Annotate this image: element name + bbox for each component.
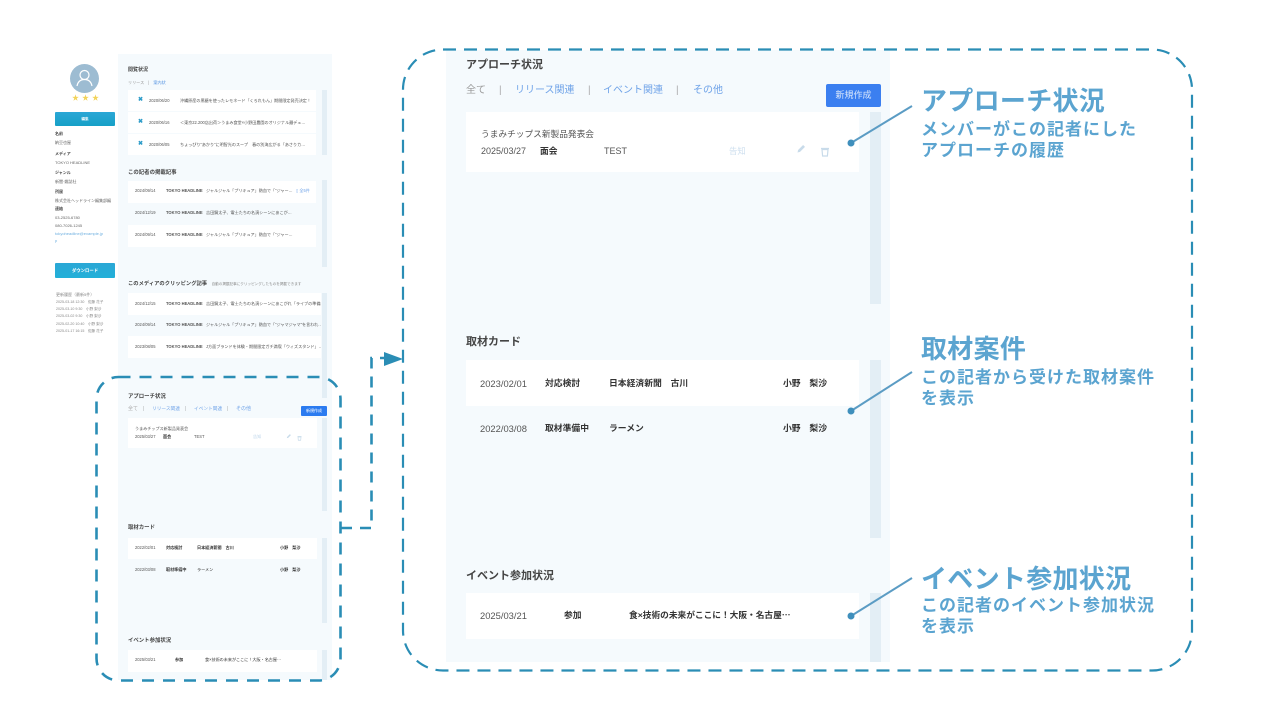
callout: event participation <box>921 564 1155 636</box>
list item: 2020/06/20 <box>149 98 170 103</box>
card: event item: 食×技術の未来がここに！大阪・名古屋⋯ <box>205 657 281 662</box>
text: update history: 2025-03-18 12:30 佐藤 花子 <box>56 300 103 304</box>
text: profile details: 連絡 <box>55 206 63 211</box>
arrow: dashed connector <box>342 352 402 530</box>
text: profile details: ジャンル <box>55 170 71 175</box>
card: approach item: TEST <box>194 434 204 439</box>
panel: profile sidebar <box>55 64 115 333</box>
interview item 2: 小野 梨沙 <box>783 423 827 433</box>
list item: J方面ブランドを体験・期間限定ガチ満喫「ウィズスタンド」… <box>206 344 321 349</box>
card: interview item <box>128 538 317 559</box>
heading: viewing status: 閲覧状況 <box>128 67 148 73</box>
section: interview cards <box>466 336 881 538</box>
card: interview item 1 <box>466 360 859 406</box>
text: profile details: 080-7026-1245 <box>55 223 82 228</box>
text: profile details: TOKYO HEADLINE <box>55 160 90 165</box>
text: update history: 2025-03-02 9:30 小野 梨沙 <box>56 314 101 318</box>
tabs: approach filters: イベント関連 <box>603 85 663 96</box>
list item: ✖ <box>138 119 143 125</box>
text: date: 2025/03/27 <box>481 146 526 156</box>
interview item 2: 取材準備中 <box>545 423 589 433</box>
text: profile details: p <box>55 238 57 243</box>
list item: 2020/06/05 <box>149 142 170 147</box>
list item: TOKYO HEADLINE <box>166 344 203 349</box>
card: interview item: 2022/02/01 <box>135 545 156 550</box>
card: interview item: 対応検討 <box>166 545 182 550</box>
list item <box>128 90 316 111</box>
icon: rating stars: ★★★ <box>72 95 102 102</box>
text: profile details: tokyoheadline@example.jp <box>55 231 103 236</box>
heading: event participation: イベント参加状況 <box>128 638 171 644</box>
interview item: 小野 梨沙 <box>280 567 300 572</box>
text: update history: 2025-01-17 16:15 佐藤 花子 <box>56 329 103 333</box>
list item: TOKYO HEADLINE <box>166 301 203 306</box>
card: event item: 2025/03/21 <box>135 657 156 662</box>
list item: ＜東京22.200店出荷＞うまみ食堂×小野田農園のオリジナル麺デュ… <box>180 120 305 125</box>
list item <box>128 134 316 155</box>
list item <box>128 112 316 133</box>
interview item <box>135 567 300 572</box>
card: interview item 1: 小野 梨沙 <box>783 378 827 388</box>
callout: approach status <box>921 86 1137 160</box>
card: interview item: 小野 梨沙 <box>280 545 300 550</box>
callout: event participation: を表示 <box>921 616 975 636</box>
heading: clipping articles: このメディアのクリッピング記事 自動の掲載記事にクリッピングしたものを掲載できます <box>128 281 301 287</box>
tabs: approach filters: その他 <box>693 85 723 96</box>
list item: ✖ <box>138 141 143 147</box>
callout: event participation: この記者のイベント参加状況 <box>921 596 1155 614</box>
scrollbar <box>870 360 881 538</box>
list item: TOKYO HEADLINE <box>166 210 203 215</box>
text: profile details: 株式会社ヘッドライン編集部編 <box>55 198 111 203</box>
section: articles by this reporter <box>128 168 327 267</box>
button: new <box>826 84 881 107</box>
tabs: approach filters: | <box>588 85 591 96</box>
tabs: approach filters <box>466 84 723 96</box>
card: event item: 2025/03/21 <box>480 610 527 621</box>
card: event item <box>128 650 317 672</box>
button: new: 新規作成 <box>835 90 872 100</box>
card: event item: 参加 <box>175 657 183 662</box>
text: profile details: メディア <box>55 151 71 156</box>
tabs: | <box>143 406 144 412</box>
tabs: その他 <box>236 406 251 412</box>
section: approach status <box>466 58 881 304</box>
card: interview item 1: 2023/02/01 <box>480 378 527 389</box>
list item <box>128 293 321 315</box>
icon: trash <box>821 148 829 157</box>
callout: interview cards: を表示 <box>921 388 975 408</box>
button: edit: 編集 <box>81 117 89 121</box>
button: new: 新規作成 <box>306 408 322 413</box>
card: interview item 1: 対応検討 <box>545 378 580 388</box>
scrollbar <box>322 293 327 398</box>
card: approach item: 告知 <box>253 434 261 439</box>
tabs: approach filters: 全て <box>466 85 486 96</box>
tabs: | <box>185 406 186 412</box>
leader line: interview cards <box>848 371 912 414</box>
card: approach item: 面会 <box>163 434 171 439</box>
list item: ジャルジャル「プリキュア」熱血で「“ジャー… <box>206 232 293 237</box>
card: interview item 1: 日本経済新聞 古川 <box>609 378 688 388</box>
callout: interview cards: 取材案件 <box>921 334 1026 364</box>
heading: event participation: イベント参加状況 <box>466 570 554 582</box>
text: profile details: 所属 <box>55 189 63 194</box>
list item: 2024/12/15 <box>135 301 156 306</box>
callout: event participation: イベント参加状況 <box>921 564 1131 594</box>
heading: approach status: アプローチ状況 <box>466 59 543 71</box>
card: approach item <box>128 418 317 448</box>
tabs: | <box>227 406 228 412</box>
list item: ジャルジャル「プリキュア」熱血で「“ジャマジャマ”を言われ… <box>206 322 321 327</box>
section: event participation thumbnail <box>128 636 327 680</box>
card: approach item <box>466 112 859 172</box>
list item <box>128 225 316 247</box>
button: download: ダウンロード <box>72 268 98 273</box>
tabs: approach filters: リリース関連 <box>515 85 574 96</box>
list item <box>128 181 316 203</box>
list item: 吉田鋼太子、電士たちの名演シーンにあこが… <box>206 210 292 215</box>
card: approach item: うまみチップス新製品発表会 <box>135 426 188 431</box>
card: event item: 参加 <box>564 610 582 620</box>
list item: ちょっぴり“あかり”に明智光のスープ 春の別海広がる「あさりカ… <box>180 142 305 147</box>
interview item: ラーメン <box>197 567 213 572</box>
section: media clippings <box>128 280 327 398</box>
tabs: リリース | 案内状 <box>128 80 166 85</box>
icon: avatar <box>70 64 99 93</box>
interview item 2: 2022/03/08 <box>480 423 527 434</box>
heading: reporter articles: この記者の掲載記事 <box>128 170 177 176</box>
button: edit <box>55 112 115 126</box>
text: event name: うまみチップス新製品発表会 <box>481 129 594 139</box>
heading: interview cards: 取材カード <box>466 336 521 348</box>
section: approach status thumbnail <box>128 392 327 511</box>
section: viewing status <box>128 66 327 155</box>
interview item 2 <box>480 423 827 434</box>
heading: approach status: アプローチ状況 <box>128 394 166 400</box>
icon: pencil <box>798 145 805 152</box>
text: detail: TEST <box>604 146 627 156</box>
scrollbar <box>322 90 327 155</box>
list item: ✖ <box>138 97 143 103</box>
section: interview cards thumbnail <box>128 524 327 623</box>
text: update history: 2025-02-20 10:40 小野 梨沙 <box>56 322 103 326</box>
card: approach item: 2025/03/27 <box>135 434 156 439</box>
text: type: 面会 <box>540 146 557 156</box>
callout: approach status: アプローチの履歴 <box>921 140 1065 160</box>
text: profile details <box>55 131 111 243</box>
panel: enlarged detail <box>446 50 890 662</box>
tabs: approach filters: | <box>499 85 502 96</box>
scrollbar <box>870 112 881 304</box>
interview item: 取材準備中 <box>166 567 186 572</box>
panel: dashboard thumbnail <box>55 54 332 680</box>
callout: approach status: アプローチ状況 <box>921 86 1105 116</box>
text: update history: 更新履歴（最新5件） <box>56 292 94 297</box>
text: update history <box>56 292 104 333</box>
list item: 2024/09/14 <box>135 188 156 193</box>
heading: interview cards: 取材カード <box>128 525 155 531</box>
card: event item: 食×技術の未来がここに！大阪・名古屋⋯ <box>629 610 790 620</box>
list item <box>135 210 292 215</box>
interview item 2: ラーメン <box>609 423 644 433</box>
text: profile details: 納豆也屋 <box>55 140 71 145</box>
section: event participation <box>466 570 881 662</box>
text: author: 告知 <box>729 146 746 156</box>
text: profile details: 03-2525-6780 <box>55 215 80 220</box>
scrollbar <box>322 180 327 267</box>
list item: 沖縄原産の黒糖を使ったレモネード「くろれもん」期間限定発売決定！ <box>180 98 311 103</box>
panel: main thumbnail background <box>118 54 332 680</box>
list item: 2024/09/14 <box>135 322 156 327</box>
card: event item <box>466 593 859 639</box>
button: download <box>55 263 115 278</box>
list item: ▯ 全5件 <box>296 188 310 193</box>
scrollbar <box>322 650 327 680</box>
scrollbar <box>322 418 327 511</box>
leader line: approach status <box>848 105 912 146</box>
callout: interview cards: この記者から受けた取材案件 <box>921 368 1155 386</box>
text: profile details: 名前 <box>55 131 63 136</box>
list item: ジャルジャル「プリキュア」熱血で「“ジャー… <box>206 188 293 193</box>
leader line: event participation <box>848 577 912 620</box>
button: new <box>301 406 327 416</box>
list item: 2024/12/19 <box>135 210 156 215</box>
card: interview item: 日本経済新聞 古川 <box>197 545 234 550</box>
list item <box>135 322 321 327</box>
tabs: approach filters: | <box>676 85 679 96</box>
list item: 2024/09/14 <box>135 232 156 237</box>
list item: TOKYO HEADLINE <box>166 188 203 193</box>
interview item: 2022/03/08 <box>135 567 156 572</box>
list item: TOKYO HEADLINE <box>166 232 203 237</box>
tabs <box>128 406 251 412</box>
callout: interview cards <box>921 334 1155 408</box>
scrollbar <box>322 538 327 623</box>
list item: 吉田鋼太子、電士たちの名演シーンにあこがれ「ライブの準備… <box>206 301 321 306</box>
tabs: イベント関連 <box>194 406 222 411</box>
list item: 2020/06/16 <box>149 120 170 125</box>
tabs: リリース関連 <box>152 406 180 411</box>
list item: TOKYO HEADLINE <box>166 322 203 327</box>
scrollbar <box>870 593 881 662</box>
list item <box>128 336 321 358</box>
list item: 2023/08/05 <box>135 344 156 349</box>
callout: approach status: メンバーがこの記者にした <box>921 120 1137 138</box>
text: profile details: 新聞·雑誌社 <box>55 179 76 184</box>
tabs: 全て <box>128 406 138 412</box>
text: update history: 2025-03-10 9:30 小野 梨沙 <box>56 307 101 311</box>
